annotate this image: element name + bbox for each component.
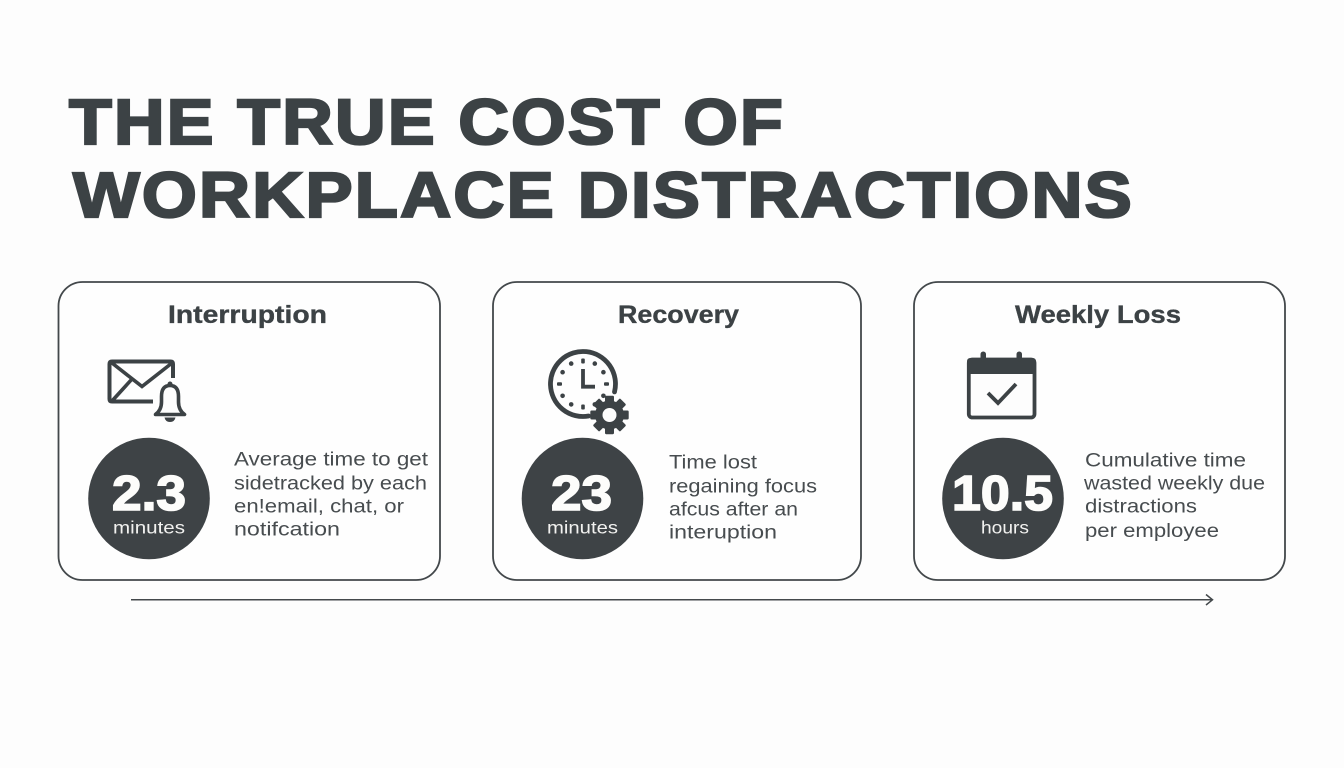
panel: interruption: [58, 282, 440, 580]
icon: clock and gear: [550, 351, 629, 434]
arrow: timeline: [131, 594, 1212, 605]
description: weekly loss: wasted weekly due: [1083, 474, 1265, 494]
description: weekly loss: distractions: [1085, 496, 1197, 518]
panel: weekly loss: [914, 282, 1285, 580]
title: THE TRUE COST OF: [69, 86, 785, 158]
stat: 23 minutes: [522, 438, 643, 559]
icon: envelope and bell: [110, 362, 184, 422]
description: interruption: en!email, chat, or: [234, 496, 405, 518]
panel: recovery: [493, 282, 861, 580]
description: interruption: sidetracked by each: [234, 474, 427, 494]
description: recovery: regaining focus: [669, 476, 817, 498]
description: recovery: Time lost: [669, 452, 758, 474]
stat: 10.5 hours: hours: [981, 518, 1029, 538]
description: recovery: [669, 452, 817, 544]
icon: calendar with check: [967, 352, 1036, 418]
stat: 2.3 minutes: [88, 438, 210, 559]
title: WORKPLACE DISTRACTIONS: [73, 159, 1134, 231]
stat: 23 minutes: minutes: [547, 518, 618, 538]
stat: 10.5 hours: [942, 438, 1064, 559]
description: weekly loss: Cumulative time: [1085, 450, 1246, 472]
heading: recovery: Recovery: [618, 301, 739, 329]
description: interruption: Average time to get: [234, 450, 429, 470]
heading: interruption: Interruption: [168, 301, 327, 329]
heading: weekly loss: Weekly Loss: [1015, 301, 1181, 329]
description: interruption: notifcation: [234, 520, 340, 540]
title: [69, 86, 1134, 231]
stat: 23 minutes: 23: [551, 467, 612, 521]
stat: 2.3 minutes: minutes: [113, 518, 185, 538]
stat: 10.5 hours: 10.5: [952, 467, 1053, 521]
description: recovery: afcus after an: [669, 500, 798, 520]
description: recovery: interuption: [669, 522, 777, 544]
description: weekly loss: [1083, 450, 1265, 542]
description: weekly loss: per employee: [1085, 521, 1219, 542]
description: interruption: [234, 450, 429, 540]
stat: 2.3 minutes: 2.3: [112, 467, 186, 521]
